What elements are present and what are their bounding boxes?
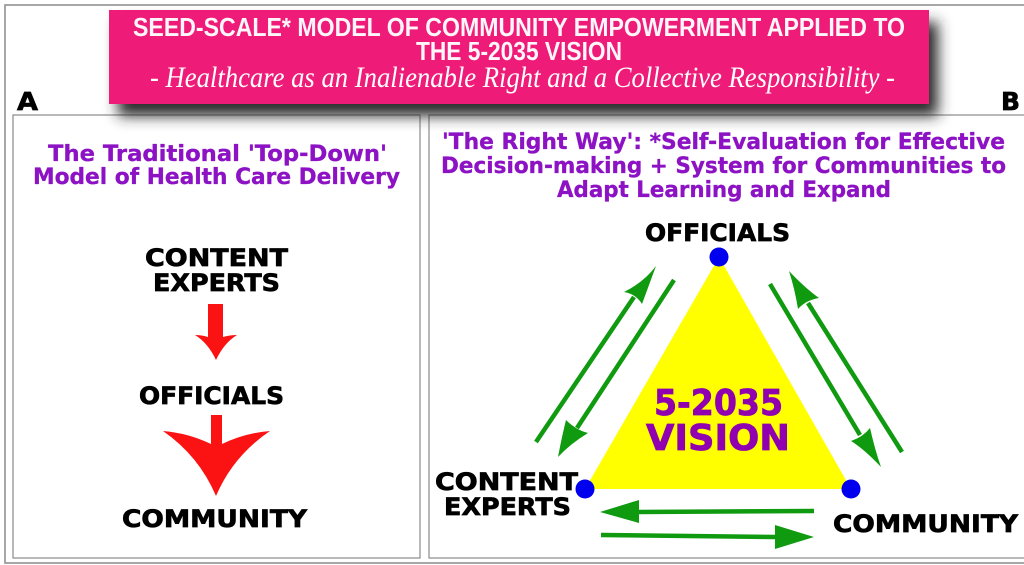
panel: B the right way	[429, 115, 1024, 558]
label: officials: OFFICIALS	[645, 219, 790, 247]
panel: A traditional top-down model	[13, 115, 420, 558]
title: SEED-SCALE* MODEL OF COMMUNITY EMPOWERMENT APPLIED TO	[133, 12, 905, 42]
subtitle: - Healthcare as an Inalienable Right and a Collective Responsibility -	[150, 61, 895, 94]
label: community: COMMUNITY	[833, 510, 1019, 538]
heading: panel A: Model of Health Care Delivery	[33, 165, 400, 190]
label: content experts	[435, 468, 579, 521]
arrow: community to experts	[600, 500, 814, 523]
arrow: officials to community	[163, 415, 270, 496]
arrow: experts to officials	[195, 304, 237, 360]
heading: panel A	[33, 142, 400, 190]
node: officials	[710, 248, 728, 266]
label: community: COMMUNITY	[122, 505, 308, 533]
label: content experts: EXPERTS	[444, 493, 571, 521]
title banner	[109, 10, 929, 104]
triangle label	[646, 383, 790, 459]
arrow: experts to community	[601, 525, 814, 549]
arrow: experts to officials	[536, 266, 656, 442]
triangle: 5-2035 vision	[585, 257, 851, 489]
node: community	[842, 480, 860, 498]
label: content experts: EXPERTS	[153, 269, 280, 297]
arrow: officials to community	[770, 284, 881, 467]
arrow: community to officials	[789, 271, 902, 452]
heading: panel B: Decision-making + System for Communities to	[441, 154, 1006, 179]
section letter A: A	[17, 87, 39, 116]
label: content experts: CONTENT	[435, 468, 579, 496]
label: officials: OFFICIALS	[139, 382, 284, 410]
label: content experts: CONTENT	[145, 244, 289, 272]
label: content experts	[145, 244, 289, 297]
section letter B: B	[1001, 87, 1020, 116]
arrow: officials to experts	[558, 280, 674, 457]
heading: panel B: 'The Right Way': *Self-Evaluation for Effective	[442, 130, 1005, 155]
heading: panel B	[441, 130, 1006, 203]
banner shadow	[118, 22, 938, 116]
node: content experts	[576, 480, 594, 498]
heading: panel B: Adapt Learning and Expand	[557, 178, 891, 203]
heading: panel A: The Traditional 'Top-Down'	[48, 142, 387, 167]
title	[133, 12, 905, 66]
title: THE 5-2035 VISION	[416, 36, 622, 66]
triangle label: 5-2035	[654, 383, 783, 424]
triangle label: VISION	[646, 418, 790, 459]
